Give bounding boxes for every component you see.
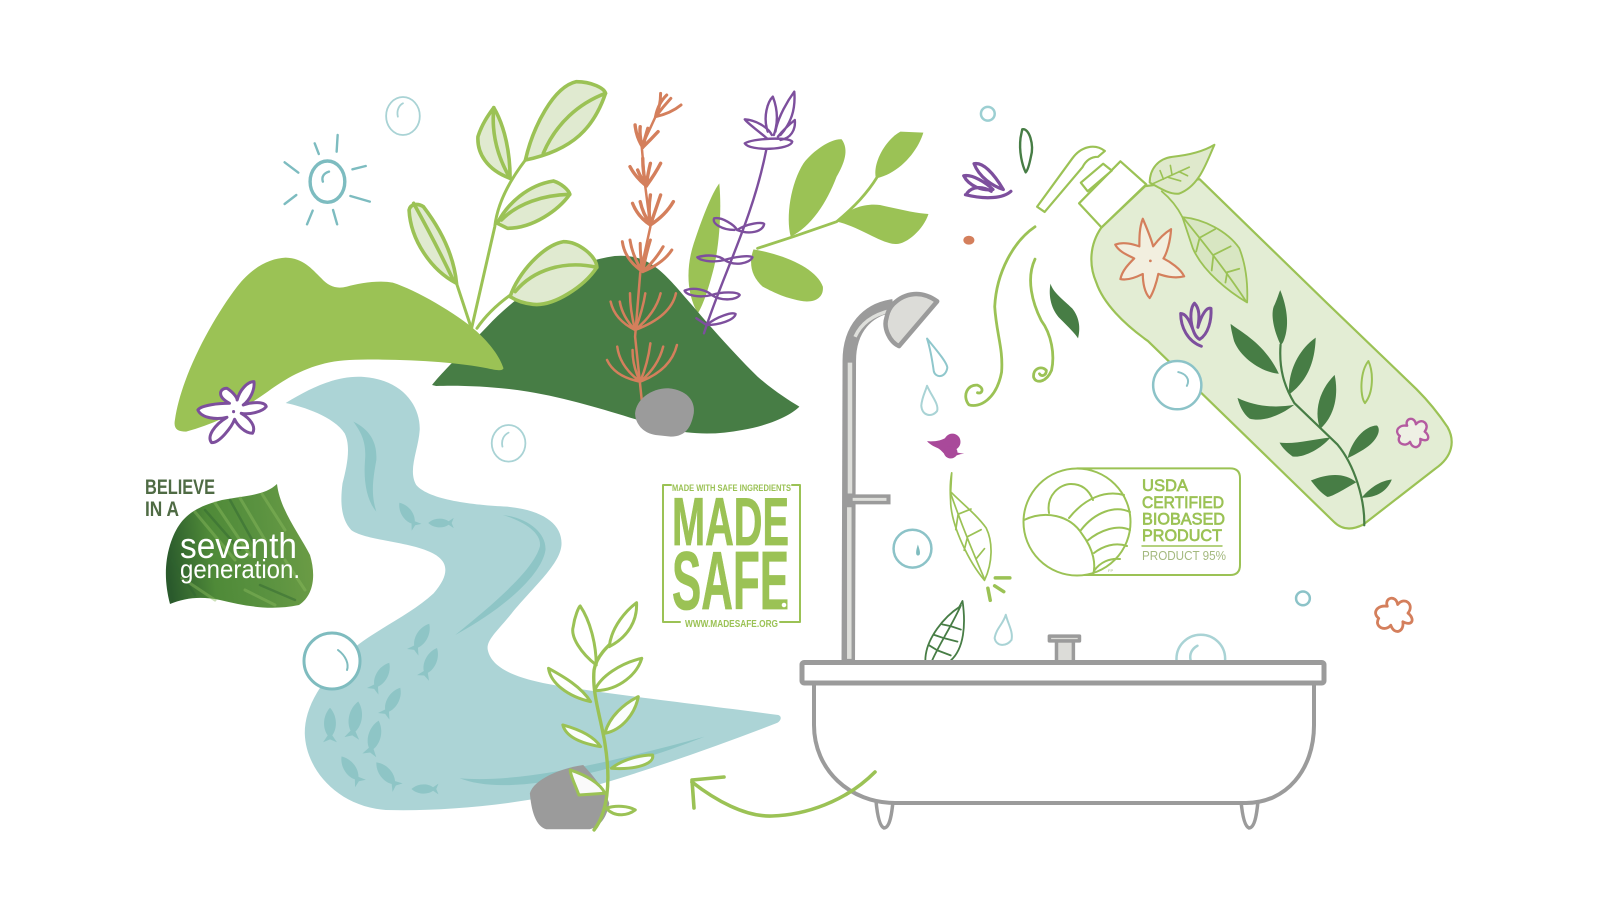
purple tulip in bottle bbox=[1181, 303, 1211, 346]
fish school bbox=[323, 499, 454, 794]
magenta splash bbox=[927, 434, 964, 458]
bottle pump bbox=[1037, 147, 1146, 227]
small bubble above river bbox=[492, 425, 525, 462]
orange flower outside bottle bbox=[1376, 598, 1412, 631]
river plant bbox=[549, 603, 653, 830]
orange flower in bottle bbox=[1115, 219, 1184, 298]
purple tulip outside bottle bbox=[964, 164, 1011, 198]
badge: made safe: SAFE bbox=[672, 534, 789, 627]
dark green hill bbox=[432, 256, 799, 434]
water drops bbox=[921, 339, 1012, 645]
badge: USDA certified biobased bbox=[1024, 468, 1240, 576]
small bubble lower right bbox=[1296, 591, 1310, 605]
dark line leaf at rim bbox=[925, 601, 964, 661]
grey rock by river bbox=[530, 765, 609, 829]
arrow tail over tub bbox=[846, 772, 875, 794]
flat green leaves branch bbox=[688, 132, 928, 313]
bubble on bottle edge bbox=[1153, 361, 1201, 409]
icon: sun bbox=[285, 135, 370, 224]
light green hill bbox=[175, 258, 503, 432]
soap swirl vines bbox=[966, 227, 1053, 406]
badge: USDA certified biobased: USDA bbox=[1142, 476, 1189, 495]
purple lavender plant bbox=[685, 92, 795, 333]
badge: USDA certified biobased: PRODUCT 95% bbox=[1142, 549, 1226, 563]
small bubble top bbox=[386, 97, 420, 135]
river bbox=[286, 377, 781, 810]
badge: USDA certified biobased: CERTIFIED bbox=[1142, 493, 1224, 512]
outlined dark leaf bbox=[1020, 129, 1032, 172]
bubble on river bbox=[304, 633, 360, 689]
badge: USDA certified biobased: FP bbox=[1108, 568, 1113, 573]
logo: seventh generation: BELIEVE bbox=[145, 476, 215, 499]
bottle top leaf bbox=[1150, 145, 1214, 194]
bathtub bbox=[802, 662, 1324, 828]
logo: seventh generation bbox=[145, 476, 313, 608]
orange dot bbox=[963, 236, 974, 245]
logo: seventh generation: IN A bbox=[145, 498, 179, 521]
purple flower on hill bbox=[198, 382, 266, 443]
solid dark leaf bbox=[1050, 284, 1079, 338]
logo: seventh generation: seventh bbox=[180, 525, 297, 566]
dark branch in bottle bbox=[1231, 290, 1392, 525]
bubble behind tub rim bbox=[1176, 635, 1225, 683]
outlined plant on hills bbox=[409, 82, 606, 332]
badge: made safe bbox=[663, 483, 800, 630]
bubble with drop bbox=[894, 530, 931, 568]
falling green leaf bbox=[950, 473, 1010, 600]
arrow from tub to river bbox=[692, 772, 875, 816]
logo: seventh generation: generation. bbox=[180, 554, 300, 584]
small outline leaf in bottle bbox=[1361, 361, 1372, 403]
orange horsetail plant bbox=[607, 93, 681, 400]
bottle inner leaf bbox=[1162, 191, 1247, 303]
badge: USDA certified biobased: BIOBASED bbox=[1142, 510, 1225, 528]
faucet bbox=[1049, 636, 1079, 662]
shower pipe and arm bbox=[846, 306, 893, 662]
badge: made safe: WWW.MADESAFE.ORG bbox=[685, 619, 778, 630]
badge: made safe: MADE WITH SAFE INGREDIENTS bbox=[672, 483, 791, 494]
badge: made safe: MADE bbox=[672, 484, 789, 560]
grey rock on hill bbox=[635, 388, 694, 437]
bottle body bbox=[1091, 179, 1452, 528]
badge: USDA certified biobased: PRODUCT bbox=[1142, 526, 1222, 545]
shower head bbox=[886, 294, 937, 346]
small bubble top right bbox=[981, 107, 995, 121]
pink flower in bottle bbox=[1397, 419, 1428, 447]
